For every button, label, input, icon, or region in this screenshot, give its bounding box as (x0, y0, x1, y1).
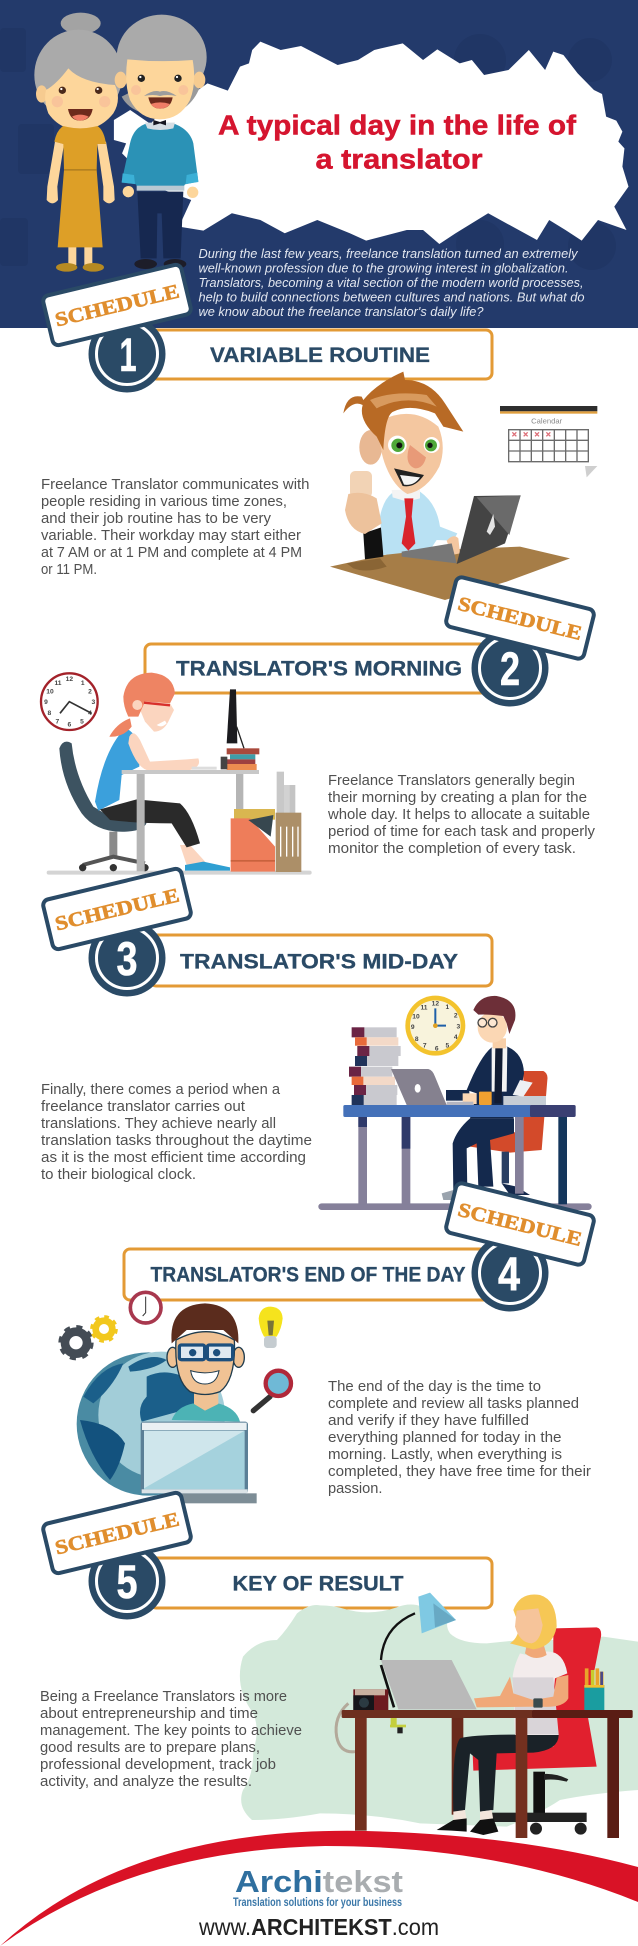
wall clock: 8 (47, 710, 51, 717)
laptop (141, 1422, 257, 1503)
section 1 paragraph: at 7 AM or at 1 PM and complete at 4 PM (41, 545, 302, 561)
section 5 paragraph: Being a Freelance Translators is more (40, 1689, 287, 1705)
wall clock (405, 996, 465, 1056)
intro text: help to build connections between cultures and nations. But what do (198, 290, 584, 304)
heading box (150, 935, 492, 986)
globe (77, 1352, 225, 1496)
section 2 paragraph: period of time for each task and properly (328, 824, 596, 840)
lamp (381, 1593, 456, 1707)
section 5 paragraph: professional development, track job (40, 1757, 276, 1773)
section 1 paragraph: and their job routine has to be very (41, 511, 272, 527)
number badge 2 (472, 630, 548, 706)
number badge 2: 2 (500, 642, 520, 695)
section 3 paragraph: translations. They achieve nearly all (41, 1116, 276, 1132)
laptop (381, 1660, 477, 1709)
schedule stamp 2: SCHEDULE (455, 593, 584, 645)
woman head (137, 702, 174, 732)
wall clock: 2 (454, 1012, 458, 1019)
number badge 3 (88, 920, 166, 996)
rear desk leg (452, 1718, 463, 1815)
wall clock: 4 (88, 710, 92, 717)
woman (437, 1594, 568, 1835)
section 4 paragraph: completed, they have free time for their (328, 1464, 591, 1480)
camera (336, 1689, 388, 1752)
character (167, 1303, 244, 1422)
wall clock: 1 (445, 1004, 449, 1011)
heading box (150, 1558, 492, 1608)
intro text: During the last few years, freelance translation turned an extremely (198, 246, 579, 261)
section 1 heading (42, 264, 492, 392)
illustration: man at blue desk with books and clock (318, 996, 592, 1210)
section 3 paragraph (41, 1082, 312, 1183)
section 5 heading (42, 1492, 492, 1620)
magnifier icon (253, 1371, 291, 1411)
section 3 paragraph: freelance translator carries out (41, 1099, 245, 1115)
wall clock (41, 673, 98, 730)
bulb icon (259, 1307, 283, 1348)
heading text: VARIABLE ROUTINE (210, 344, 430, 367)
section 2 paragraph: whole day. It helps to allocate a suitable (327, 807, 590, 823)
section 4 paragraph: morning. Lastly, when everything is (328, 1447, 562, 1463)
wall clock: 5 (80, 718, 84, 725)
section 1 paragraph: Freelance Translator communicates with (41, 477, 310, 493)
schedule stamp 4: SCHEDULE (455, 1199, 584, 1251)
wall clock: 11 (54, 680, 62, 687)
wall clock: 6 (67, 722, 71, 729)
chair (470, 1071, 547, 1153)
heading box (150, 330, 492, 379)
schedule stamp 3 (42, 868, 192, 950)
section 5 paragraph: activity, and analyze the results. (40, 1774, 252, 1790)
wall clock: 9 (44, 699, 48, 706)
number badge 5 (88, 1542, 166, 1620)
number badge 5: 5 (116, 1555, 138, 1608)
schedule stamp 3: SCHEDULE (53, 884, 182, 935)
section 3 heading (42, 868, 492, 996)
white brush stroke (114, 42, 629, 244)
section 4 paragraph (328, 1379, 591, 1497)
section 3 paragraph: to their biological clock. (41, 1167, 196, 1183)
wall clock: 8 (415, 1036, 419, 1043)
man torso (467, 1047, 524, 1118)
floor bar (318, 1203, 592, 1210)
wall clock: 9 (411, 1024, 415, 1031)
intro text: Translators, becoming a vital section of the modern world processes, (198, 275, 584, 290)
section 2 paragraph: monitor the completion of every task. (328, 841, 576, 857)
section 4 paragraph: and verify if they have fulfilled (328, 1413, 529, 1429)
wall clock: 11 (420, 1004, 428, 1011)
section 4 paragraph: everything planned for today in the (328, 1430, 562, 1446)
wall clock: 3 (456, 1023, 460, 1030)
woman (34, 13, 122, 272)
illustration: woman at wooden desk with lamp (336, 1593, 633, 1838)
section 4 paragraph: complete and review all tasks planned (328, 1396, 579, 1412)
section 1 paragraph: people residing in various time zones, (41, 494, 287, 510)
section 3 paragraph: as it is the most efficient time according (41, 1150, 306, 1166)
illustration: thumbs-up man at laptop (330, 372, 570, 600)
legs of man (453, 1118, 514, 1192)
pen cup (584, 1668, 604, 1710)
book stack (349, 1027, 401, 1105)
calendar: Calendar (531, 417, 563, 426)
number badge 4: 4 (498, 1247, 520, 1300)
desk (137, 774, 145, 871)
schedule stamp 5 (42, 1492, 192, 1574)
wall clock: 12 (432, 1001, 439, 1008)
wall clock: 1 (81, 680, 85, 687)
green background blob (240, 1605, 638, 1827)
illustration: elderly couple (34, 13, 207, 272)
illustration: woman at desk with clock (41, 673, 312, 875)
section 5 paragraph (40, 1689, 302, 1790)
number badge 1: 1 (120, 328, 136, 381)
desk (330, 547, 570, 600)
red swoosh (0, 1831, 638, 1946)
footer logo: Translation solutions for your business (233, 1895, 402, 1909)
schedule stamp 5: SCHEDULE (53, 1508, 182, 1559)
section 5 paragraph: good results are to prepare plans, (40, 1740, 260, 1756)
wall clock: 6 (435, 1046, 439, 1053)
wall clock: 7 (55, 718, 59, 725)
wall clock: 5 (445, 1042, 449, 1049)
schedule stamp 1 (42, 264, 192, 346)
wall clock: 7 (423, 1042, 427, 1049)
section 2 paragraph: their morning by creating a plan for the (328, 790, 587, 806)
section 3 paragraph: translation tasks throughout the daytime (41, 1133, 312, 1149)
section 5 paragraph: about entrepreneurship and time (40, 1706, 258, 1722)
wall clock: 10 (412, 1013, 420, 1020)
intro text: well-known profession due to the growing interest in globalization. (198, 260, 568, 276)
section 4 paragraph: passion. (328, 1481, 382, 1497)
section 4 heading (124, 1182, 595, 1312)
laptop (391, 1069, 447, 1105)
schedule stamp 4 (445, 1182, 595, 1266)
section 1 paragraph (41, 477, 310, 578)
heading text: KEY OF RESULT (232, 1572, 404, 1596)
chair (473, 1627, 601, 1835)
intro text (198, 246, 584, 319)
section 1 paragraph: or 11 PM. (41, 562, 97, 578)
wall clock: 3 (91, 699, 95, 706)
section 2 paragraph: Freelance Translators generally begin (328, 773, 575, 789)
gear icons (60, 1317, 116, 1358)
section 3 paragraph: Finally, there comes a period when a (41, 1082, 281, 1098)
title: a translator (316, 144, 483, 174)
heading text: TRANSLATOR'S MORNING (176, 658, 462, 680)
heading text: TRANSLATOR'S MID-DAY (180, 950, 458, 974)
footer logo: Archi tekst (235, 1864, 403, 1899)
footer url: www.ARCHITEKST.com (198, 1914, 439, 1940)
number badge 3: 3 (116, 932, 138, 985)
number badge 1 (88, 316, 166, 392)
title (218, 110, 577, 174)
number badge 4 (472, 1234, 548, 1312)
section 2 paragraph (327, 773, 596, 857)
schedule stamp 2 (445, 576, 595, 660)
box and holder (277, 772, 284, 813)
calendar (500, 406, 597, 477)
section 5 paragraph: management. The key points to achieve (40, 1723, 302, 1739)
desk (343, 1105, 532, 1117)
illustration: man with globe and laptop (60, 1292, 291, 1503)
section 1 paragraph: variable. Their workday may start either (41, 528, 301, 544)
desk (342, 1710, 633, 1838)
section 2 heading (145, 576, 595, 706)
wall clock: 4 (454, 1034, 458, 1041)
schedule stamp 1: SCHEDULE (53, 280, 182, 331)
heading text: TRANSLATOR'S END OF THE DAY (150, 1264, 466, 1286)
laptop (402, 543, 457, 563)
mug and printer (479, 1092, 492, 1105)
header panel (0, 0, 638, 328)
wall clock: 2 (88, 688, 92, 695)
title: A typical day in the life of (218, 110, 577, 140)
wall clock: 12 (66, 676, 73, 683)
wall clock: 10 (46, 688, 54, 695)
heading box (124, 1249, 492, 1300)
intro text: we know about the freelance translator's daily life? (198, 304, 484, 319)
heading box (145, 644, 490, 693)
clock icon (130, 1292, 161, 1323)
man (115, 15, 207, 269)
section 4 paragraph: The end of the day is the time to (328, 1379, 541, 1395)
